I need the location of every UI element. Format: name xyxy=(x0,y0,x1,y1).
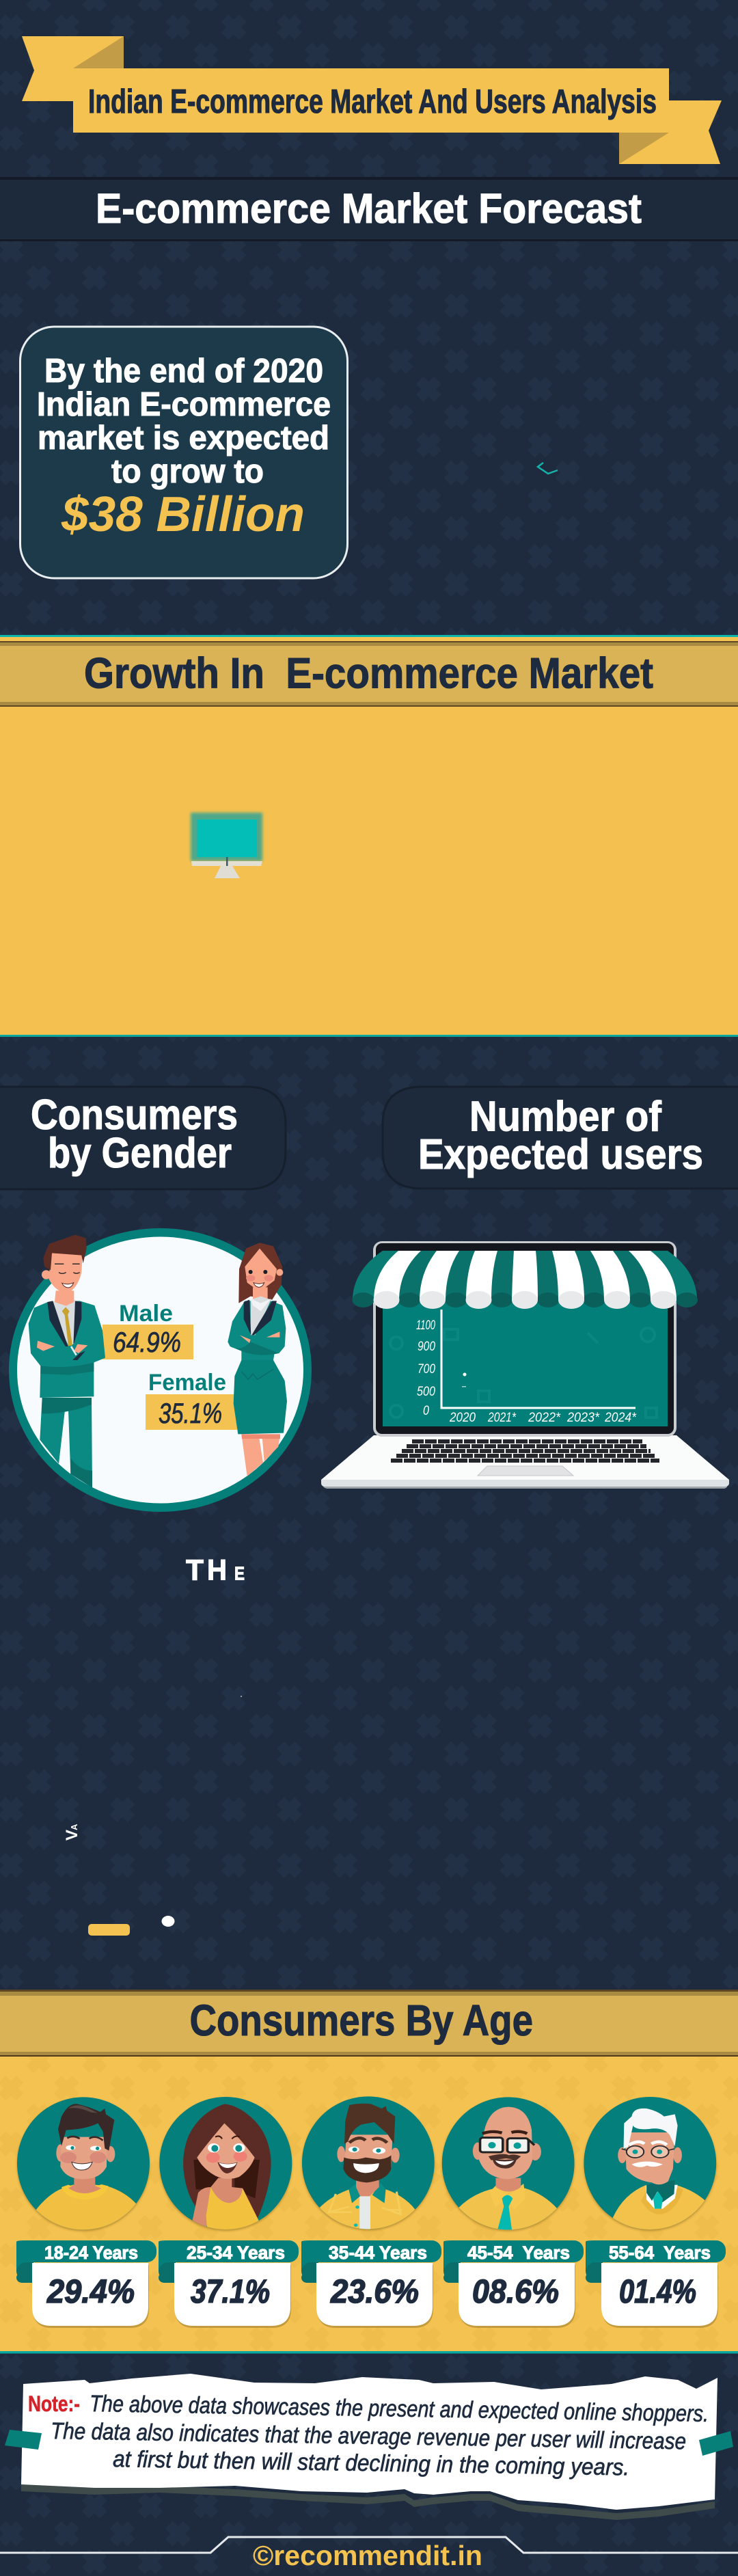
stat card: 35-44: 35-44 Years xyxy=(329,2242,427,2263)
heading fragment: THE: E xyxy=(234,1562,245,1584)
fragment: white dot xyxy=(161,1916,175,1927)
illustration: woman xyxy=(228,1243,287,1476)
callout: market forecast xyxy=(20,327,347,578)
line chart axes xyxy=(416,1310,637,1425)
tape: left xyxy=(5,2430,42,2450)
x axis labels: 2022* xyxy=(528,1411,561,1425)
stat card: 55-64: 55-64 Years xyxy=(609,2242,711,2263)
text fragment: VA rotated: A xyxy=(69,1823,79,1830)
callout: market forecast: to grow to xyxy=(111,453,264,490)
stat card: 25-34 xyxy=(159,2240,299,2328)
faint screen icons xyxy=(390,1328,657,1418)
male label: Male xyxy=(119,1301,173,1327)
heading tab: number of expected users: Number of xyxy=(469,1094,661,1140)
y axis labels: 0 xyxy=(423,1404,429,1418)
y axis labels: 500 xyxy=(417,1385,435,1399)
stat card: 45-54 xyxy=(443,2240,584,2328)
female label: 35.1% xyxy=(159,1397,222,1429)
panel: gender circle xyxy=(9,1228,312,1512)
male label: 64.9% xyxy=(113,1326,181,1358)
tape: right xyxy=(699,2431,733,2456)
laptop base xyxy=(321,1435,729,1489)
illustration: man xyxy=(29,1235,105,1488)
stat card: 35-44 xyxy=(301,2240,441,2328)
heading band: growth: Growth In E-commerce Market xyxy=(84,649,653,697)
heading band: E-commerce Market Forecast: E-commerce Market Forecast xyxy=(96,185,642,232)
heading fragment: THE: T xyxy=(186,1554,204,1587)
callout: market forecast: Indian E-commerce xyxy=(37,386,331,423)
text fragment: VA rotated xyxy=(63,1823,81,1841)
title ribbon xyxy=(22,36,722,164)
male label xyxy=(102,1301,193,1359)
stat card: 45-54: 45-54 Years xyxy=(467,2242,570,2263)
heading fragment: THE: H xyxy=(207,1554,227,1587)
heading tab: consumers by gender: by Gender xyxy=(48,1130,232,1177)
stat card: 55-64 xyxy=(586,2240,726,2328)
footer credit: ©recommendit.in xyxy=(253,2540,482,2571)
icon: monitor xyxy=(191,813,262,878)
stat card: 25-34: 37.1% xyxy=(191,2274,270,2310)
callout value: $38 Billion xyxy=(61,487,305,542)
x axis labels: 2020 xyxy=(449,1411,476,1425)
note text: at first but then will start declining in the coming years. xyxy=(113,2446,629,2481)
callout: market forecast: By the end of 2020 xyxy=(44,353,323,390)
awning xyxy=(353,1251,698,1309)
text fragment: dot xyxy=(241,1696,242,1697)
heading tab: consumers by gender xyxy=(0,1087,286,1189)
stat card: 18-24: 18-24 Years xyxy=(44,2242,138,2263)
stat card: 25-34: 25-34 Years xyxy=(187,2242,285,2263)
text fragment: VA rotated: V xyxy=(63,1830,81,1841)
stat card: 18-24 xyxy=(16,2240,156,2328)
panel: note on torn paper xyxy=(21,2374,718,2520)
portrait: 55-64 grey haired man xyxy=(584,2097,716,2233)
section divider stripes xyxy=(0,635,738,641)
note label: Note:- xyxy=(28,2391,80,2416)
note text xyxy=(51,2391,709,2481)
x axis labels: 2024* xyxy=(604,1411,637,1425)
fragment: yellow pill xyxy=(88,1924,130,1936)
female label: Female xyxy=(148,1370,226,1396)
y axis labels: 1100 xyxy=(416,1318,435,1333)
icon: small phone fragment xyxy=(538,463,558,474)
stat card: 45-54: 08.6% xyxy=(472,2274,559,2310)
stat card: 18-24: 29.4% xyxy=(46,2274,135,2310)
footer outline xyxy=(0,2537,738,2553)
y axis labels xyxy=(416,1318,435,1418)
y axis labels: 700 xyxy=(418,1362,435,1377)
heading tab: consumers by gender: Consumers xyxy=(31,1092,238,1139)
heading band: growth xyxy=(0,641,738,707)
y axis labels: 900 xyxy=(418,1340,435,1354)
callout: market forecast: market is expected xyxy=(38,420,329,457)
heading band: consumers by age: Consumers By Age xyxy=(190,1996,533,2045)
x axis labels: 2023* xyxy=(566,1411,600,1425)
section divider: teal line xyxy=(0,2351,738,2354)
laptop lid xyxy=(373,1241,676,1437)
female label xyxy=(146,1370,237,1430)
x axis labels xyxy=(449,1411,637,1425)
portrait: 18-24 man xyxy=(17,2097,150,2233)
heading band: E-commerce Market Forecast xyxy=(0,177,738,241)
heading tab: number of expected users xyxy=(383,1087,738,1189)
heading tab: number of expected users: Expected users xyxy=(418,1131,703,1178)
portrait: 45-54 bald man with glasses xyxy=(442,2097,575,2233)
illustration: laptop with awning xyxy=(321,1241,729,1489)
panel: consumers by age xyxy=(0,1990,738,2351)
panel: growth in e-commerce market xyxy=(0,641,738,1037)
portrait: 35-44 bearded man xyxy=(302,2096,435,2233)
heading band: consumers by age xyxy=(0,1990,738,2057)
stat card: 35-44: 23.6% xyxy=(330,2274,419,2310)
stat card: 55-64: 01.4% xyxy=(619,2274,696,2310)
heading fragment: THE xyxy=(186,1554,245,1587)
x axis labels: 2021* xyxy=(487,1411,516,1425)
portrait: 25-34 woman xyxy=(159,2097,292,2233)
